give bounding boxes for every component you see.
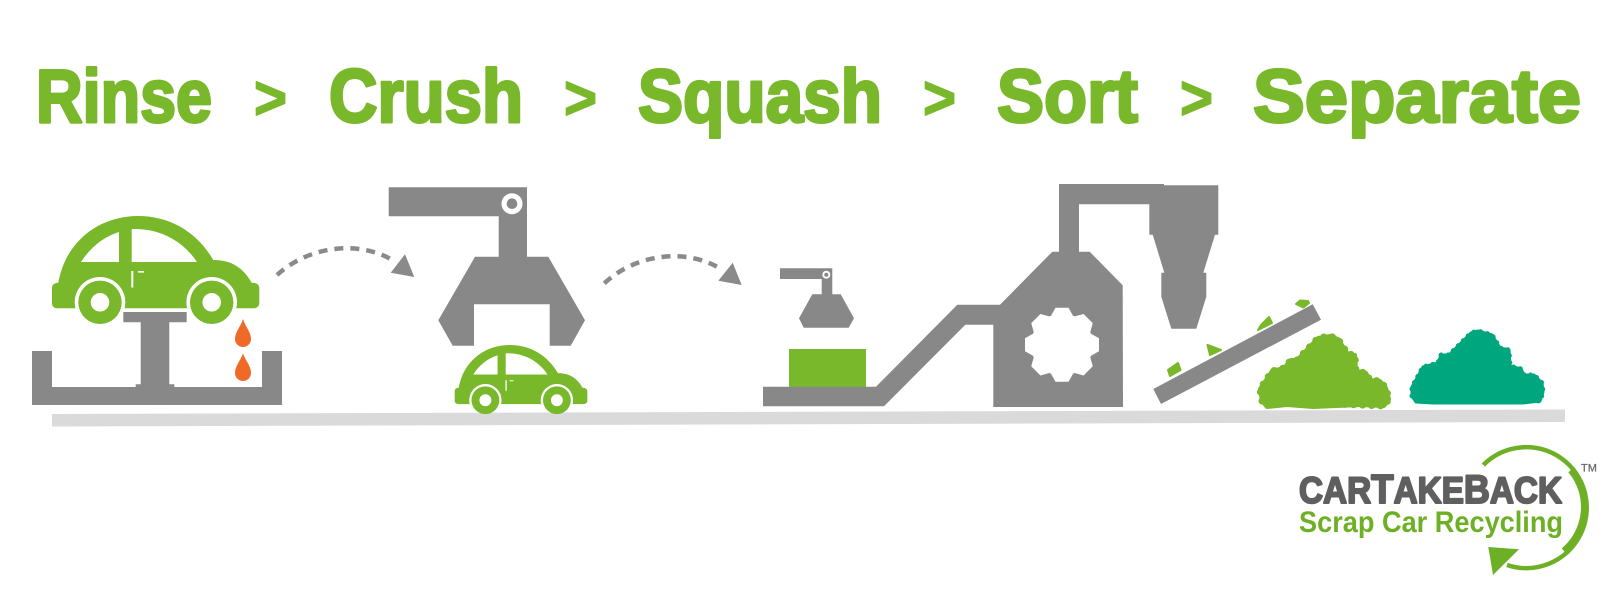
chevron 2: > bbox=[564, 64, 597, 133]
chevron 1: > bbox=[254, 64, 287, 133]
chevron 3: > bbox=[923, 64, 956, 133]
car windows bbox=[81, 229, 197, 262]
car door lines bbox=[131, 271, 144, 288]
logo recycling ring bbox=[1483, 447, 1587, 568]
arrow: rinse to crush bbox=[277, 248, 414, 277]
cyclone hopper bbox=[1149, 185, 1218, 329]
small car under claw bbox=[455, 345, 587, 416]
vehicle lift bbox=[32, 312, 282, 405]
car wheels bbox=[75, 277, 237, 328]
arrow: crush to squash bbox=[604, 256, 742, 285]
sorting belt bbox=[1153, 304, 1321, 404]
crusher claw bbox=[389, 187, 585, 346]
logo arrowhead bbox=[1488, 547, 1519, 575]
icon: shredder gear bbox=[1025, 308, 1099, 382]
step: Rinse: Rinse bbox=[36, 54, 212, 138]
teal material pile bbox=[1412, 331, 1543, 403]
step: Crush: Crush bbox=[329, 54, 523, 138]
step: Separate: Separate bbox=[1253, 54, 1581, 138]
step: Sort: Sort bbox=[997, 54, 1138, 138]
conveyor and shredder bbox=[763, 184, 1164, 407]
car body bbox=[52, 216, 259, 308]
green fragments on belt bbox=[1168, 300, 1309, 376]
small squash press bbox=[780, 268, 854, 328]
logo tagline: Scrap Car Recycling bbox=[1299, 506, 1563, 539]
trademark: TM bbox=[1581, 462, 1597, 474]
green material pile bbox=[1260, 336, 1389, 407]
icon: fluid drops bbox=[235, 319, 251, 381]
chevron 4: > bbox=[1180, 64, 1213, 133]
squashed car block bbox=[789, 349, 866, 387]
step: Squash: Squash bbox=[638, 54, 882, 138]
title bbox=[36, 54, 1581, 138]
CarTakeBack logo bbox=[1299, 447, 1597, 575]
car on lift bbox=[52, 216, 259, 328]
ground strip bbox=[52, 410, 1565, 426]
logo wordmark: CARTAKEBACK bbox=[1299, 466, 1562, 512]
